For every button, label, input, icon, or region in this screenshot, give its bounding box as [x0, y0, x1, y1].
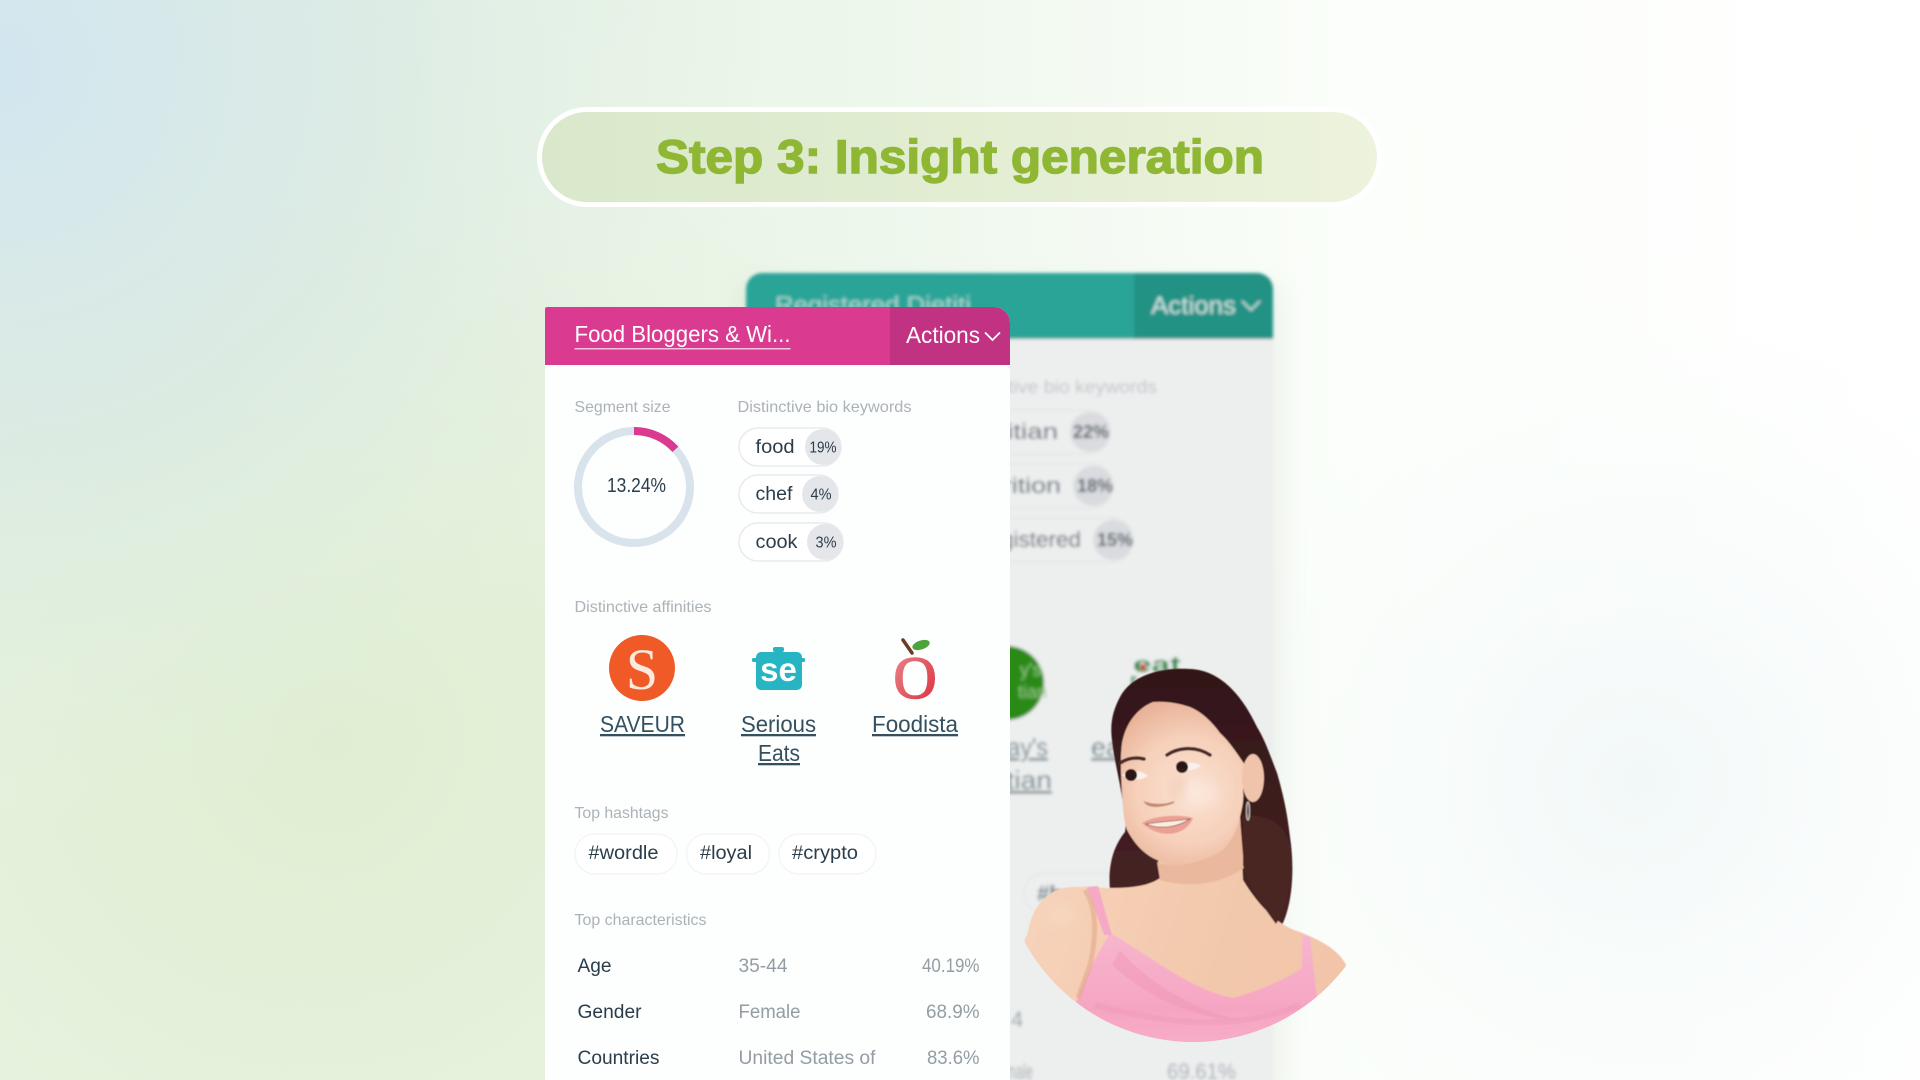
hashtags label: Top hashtags — [574, 805, 668, 822]
nose side shade — [1172, 777, 1184, 799]
panel: blurred back card (Registered Dietitian segment): #h — [1037, 881, 1063, 906]
affinity: Serious Eats: Serious — [741, 711, 816, 737]
back affinity logos: Dietitian — [950, 765, 1052, 795]
keyword chip: chef — [739, 475, 838, 513]
card header — [545, 307, 1010, 365]
back affinity logos: y's — [1020, 660, 1041, 680]
panel: blurred back card (Registered Dietitian segment): Distinctive bio keywords — [950, 377, 1157, 397]
title pill — [540, 110, 1380, 204]
back hashtag chip — [1024, 873, 1124, 913]
woman portrait in circular crop — [1024, 668, 1346, 1042]
keyword chip: cook — [739, 523, 843, 561]
keyword chip: cook: 3% — [816, 534, 836, 552]
panel: blurred back card (Registered Dietitian segment) — [740, 273, 1280, 1080]
back affinity logos: tian — [1018, 682, 1047, 702]
affinity: Foodista — [872, 638, 958, 737]
characteristics table: 68.9% — [926, 1002, 980, 1023]
back keyword chips: 18% — [1077, 476, 1113, 496]
card header: Food Bloggers & Wi... — [574, 321, 790, 347]
shoulders and chest — [1024, 817, 1346, 1002]
ear — [1242, 754, 1264, 802]
panel: blurred back card (Registered Dietitian segment): Registered Dietiti — [775, 292, 971, 319]
top folds — [1112, 951, 1228, 1018]
face — [1121, 702, 1245, 865]
donut chart: segment size — [578, 431, 690, 543]
donut chart: segment size: 13.24% — [607, 475, 666, 497]
characteristics table: Countries — [578, 1048, 660, 1069]
affinity: SAVEUR: SAVEUR — [600, 711, 685, 737]
affinity: SAVEUR: S — [626, 637, 658, 702]
arm shadow — [1078, 890, 1095, 998]
back keyword chips — [958, 410, 1133, 562]
keyword chip: chef: 4% — [810, 486, 832, 504]
back keyword chips: Nutrition — [961, 473, 1061, 498]
neck shadow — [1157, 818, 1244, 884]
back affinity logos: eatright — [1091, 732, 1182, 762]
keyword chip: food — [739, 428, 841, 466]
affinity: SAVEUR — [600, 635, 685, 737]
characteristics table: Age — [578, 956, 612, 977]
characteristics table: 83.6% — [927, 1048, 980, 1069]
hashtag chips — [575, 834, 876, 874]
brows — [1120, 749, 1210, 763]
back affinity logos: r — [1130, 670, 1137, 690]
keyword chip: chef: chef — [756, 484, 793, 505]
nose shadow — [1146, 802, 1174, 806]
hashtag chips: #wordle — [588, 843, 658, 864]
title text: Step 3: Insight generation — [656, 130, 1264, 183]
hashtag chips: #crypto — [792, 843, 858, 864]
characteristics table — [578, 956, 980, 1069]
panel: blurred back card (Registered Dietitian segment): Actions — [1151, 292, 1236, 320]
back keyword chips: 22% — [1073, 422, 1109, 442]
back affinity logos — [950, 646, 1182, 795]
characteristics table: 35-44 — [738, 956, 788, 977]
back keyword chips: registered — [981, 527, 1081, 552]
back keyword chips: Dietitian — [958, 419, 1058, 444]
back keyword chips: 15% — [1097, 530, 1133, 550]
back characteristics: 4 — [1011, 1007, 1023, 1032]
hashtag chips: #loyal — [700, 843, 752, 864]
hair — [1110, 669, 1292, 925]
earring — [1246, 802, 1250, 820]
characteristics table: Gender — [578, 1002, 642, 1023]
mouth — [1142, 816, 1193, 834]
keyword chip: food: food — [756, 437, 794, 458]
affinities label: Distinctive affinities — [574, 599, 712, 616]
affinity: Serious Eats: se — [760, 651, 797, 688]
keyword chip: cook: cook — [756, 532, 798, 553]
pink top — [1076, 934, 1317, 1042]
shoulder highlight — [1048, 903, 1076, 927]
panel: front card (Food Bloggers segment) — [545, 307, 1010, 1080]
characteristics table: Female — [738, 1002, 800, 1023]
segment size label: Segment size — [574, 399, 671, 416]
characteristics table: United States of — [738, 1048, 876, 1069]
keyword chip: food: 19% — [810, 440, 836, 456]
eyes — [1122, 761, 1201, 781]
affinity: Serious Eats — [741, 647, 816, 766]
back card header — [746, 273, 1134, 339]
back affinity logos: eat — [1133, 652, 1182, 677]
affinity: Serious Eats: Eats — [758, 740, 800, 766]
affinity: Foodista: O — [893, 645, 937, 711]
back affinity logos: Today's — [970, 732, 1048, 762]
card header: Actions — [906, 322, 980, 348]
characteristics label: Top characteristics — [574, 912, 706, 929]
bio keywords label: Distinctive bio keywords — [738, 399, 912, 416]
characteristics table: 40.19% — [922, 956, 980, 977]
cheek highlight — [1184, 785, 1216, 806]
strap — [1087, 886, 1112, 935]
affinity: Foodista: Foodista — [872, 711, 958, 737]
hair strands over right shoulder — [1243, 815, 1291, 924]
